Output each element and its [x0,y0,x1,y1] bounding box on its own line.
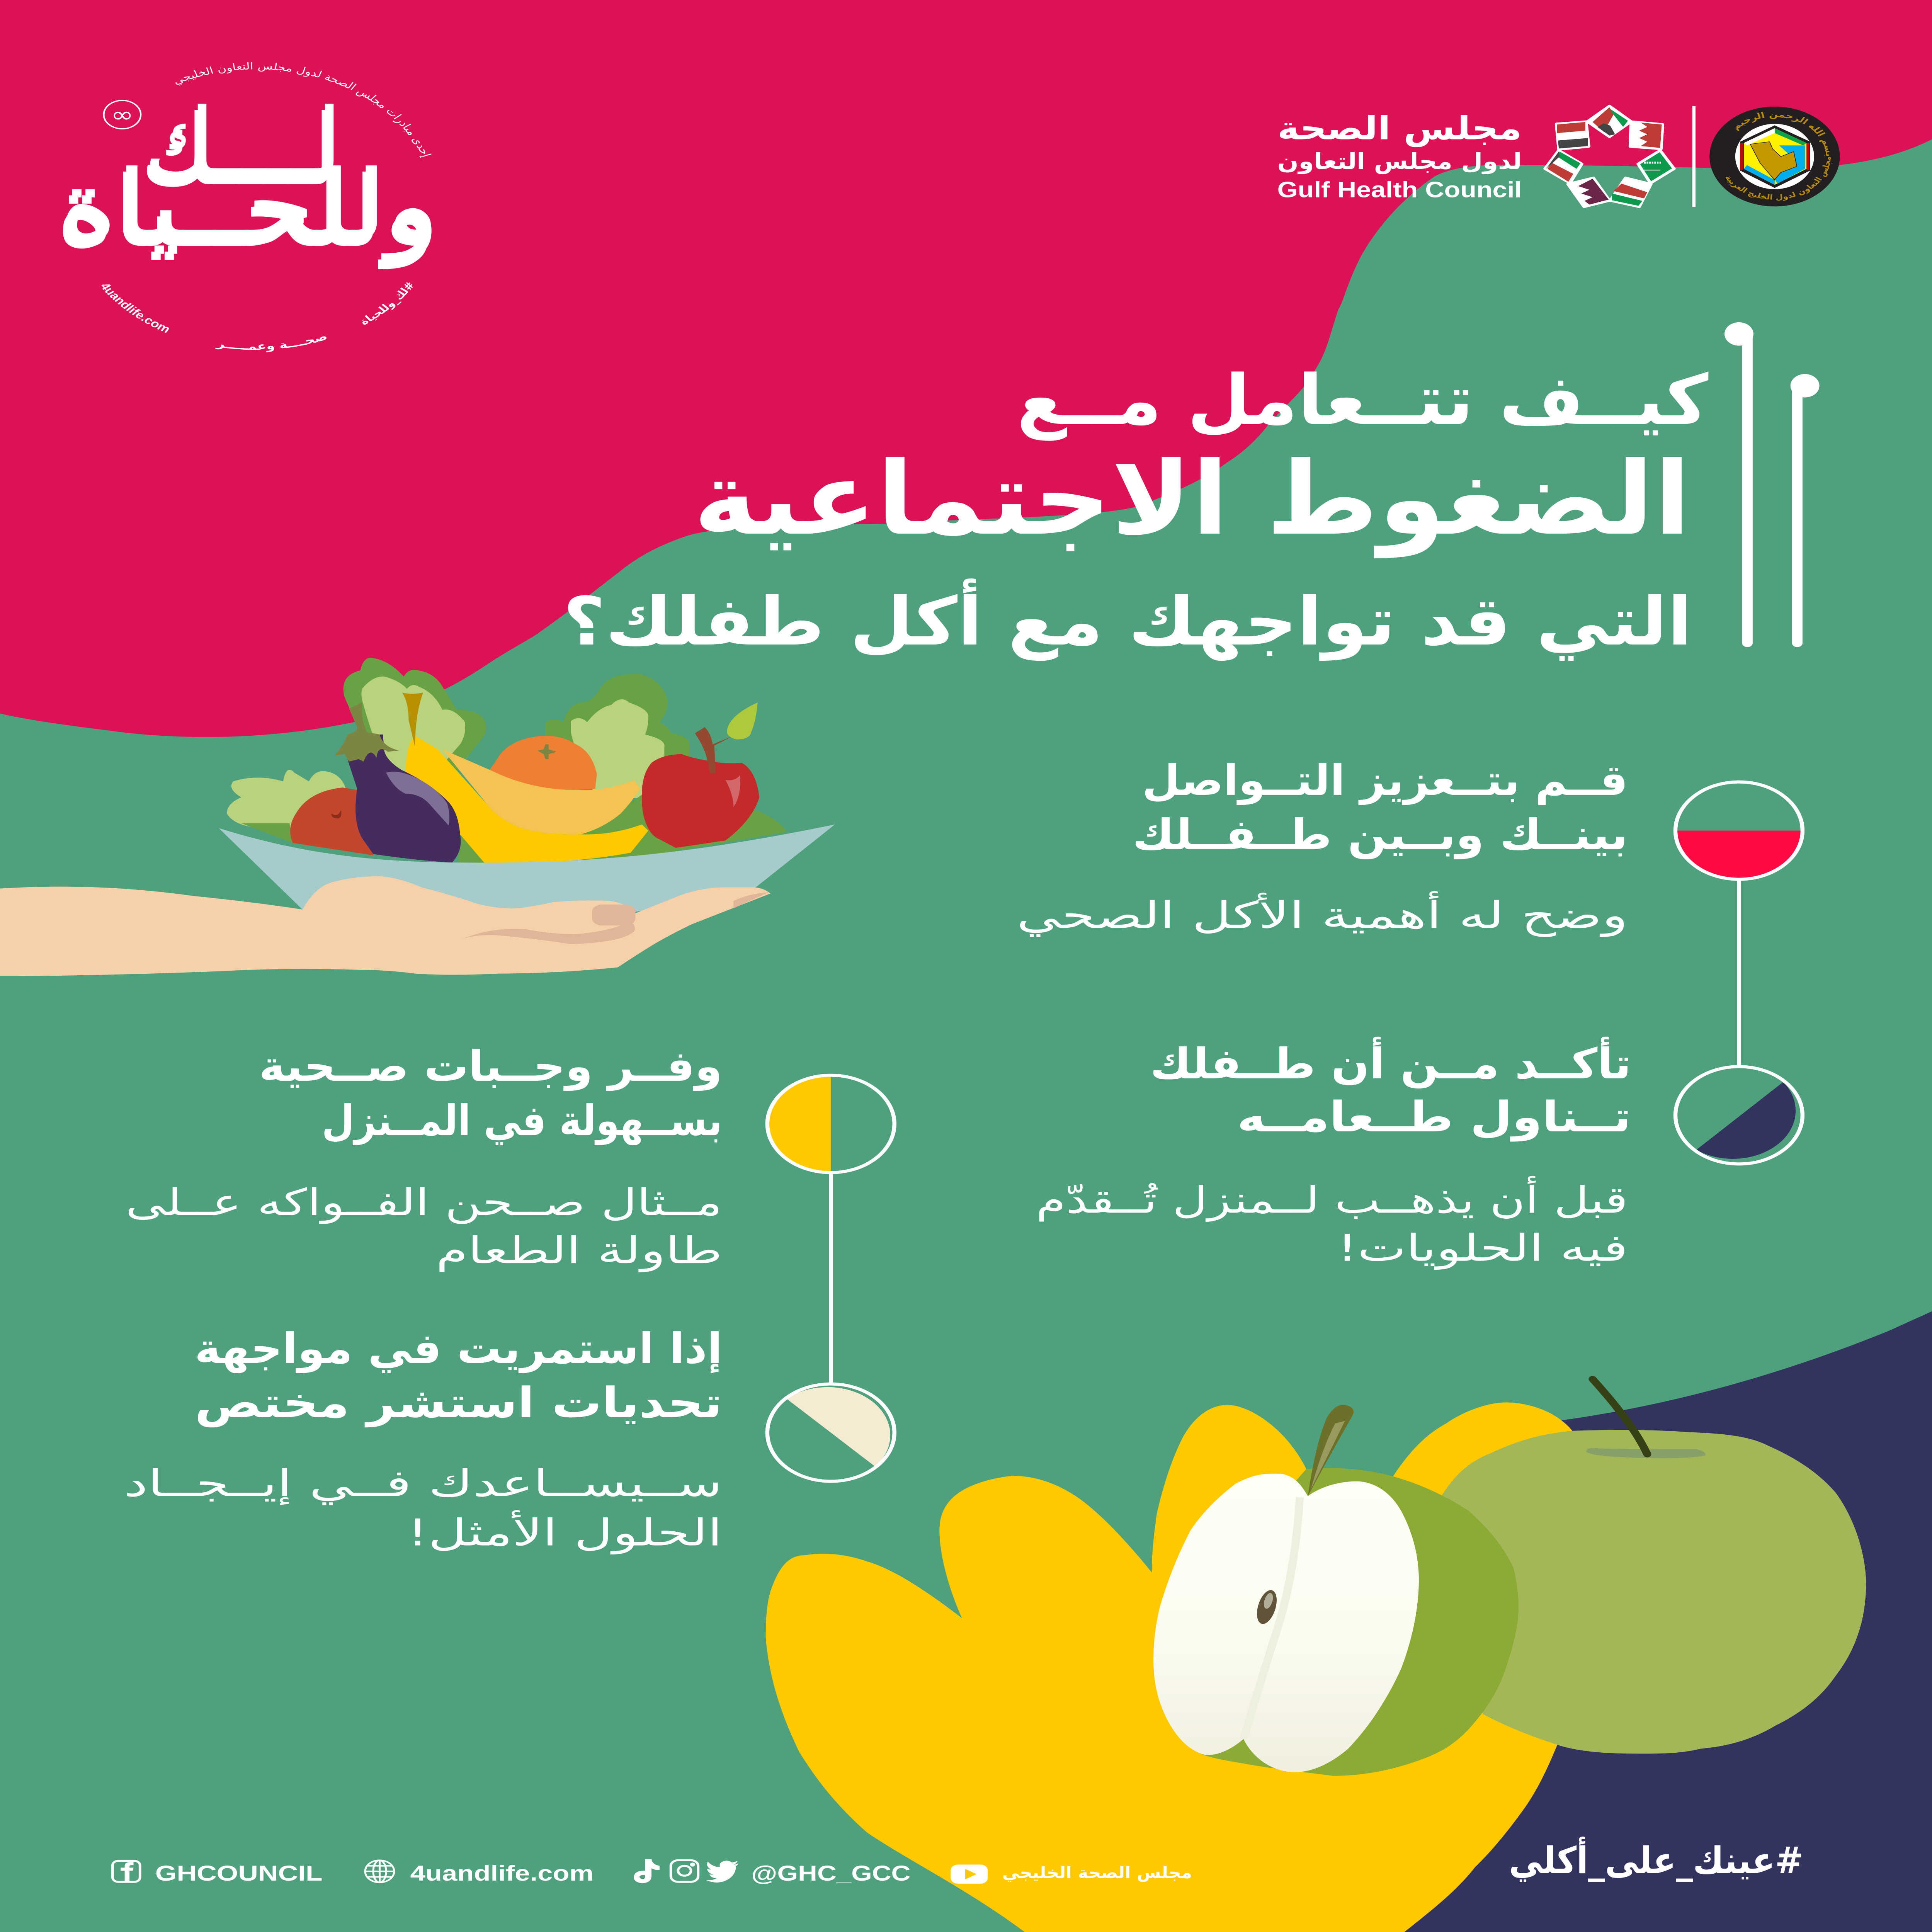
left dark lettuce [344,658,486,789]
title [563,360,1709,661]
orange [489,736,597,790]
pink top shape [0,0,1932,737]
logo wordmark: lak [141,89,341,207]
illustration: yellow splash [766,1403,1609,1932]
logo infinity mark: ∞ [111,102,134,127]
flag: Bahrain [1630,122,1663,149]
icon: GCC seal [1709,107,1840,206]
illustration: green apple [1153,1379,1866,1776]
step one: communication: قــم بتــعزيز التــواصل [1142,756,1628,805]
fingertip nail [733,892,769,908]
flesh crease [1243,1497,1300,1739]
flag: Oman [1610,178,1651,207]
bowl [219,825,835,937]
step one: communication: بينــك وبــين طــفــلك [1133,810,1628,859]
step four: consult a specialist: تحديات استشر مختص [195,1378,722,1427]
right light lettuce [571,699,665,799]
cut apple stem highlight [1311,1421,1345,1489]
title line 1: كيــف تتــعامل مــع [1017,360,1709,441]
circle: cream segment [767,1384,895,1481]
seed [1253,1589,1280,1625]
text: facebook handle: GHCOUNCIL [155,1861,323,1885]
left light leaf [227,770,357,829]
step one: communication: وضح له أهمية الأكل الصحي [1017,891,1628,937]
icon: tiktok [634,1859,660,1883]
icon: instagram [671,1860,698,1882]
second banana [442,749,640,835]
logo site text: 4uandlife.com [97,281,173,335]
text: website: 4uandlife.com [410,1861,594,1885]
logo: 4U and Life [56,60,439,352]
icon: gulf flags star [1545,106,1674,207]
illustration: hand with fruit bowl [0,658,835,976]
logo wordmark: wa lil hayat: وللحــياة [56,156,436,269]
seal gold arc text: بسم الله الرحمن الرحيم [1730,110,1835,156]
circle: navy segment [1675,1066,1803,1164]
logo hashtag text: #لك_وللحياة [357,280,418,327]
step two: eating before visits: تــناول طــعامــه [1237,1092,1631,1142]
icon: twitter [706,1861,738,1883]
circle: half yellow [767,1075,895,1173]
timeline left [767,1075,895,1481]
title line 2: الضغوط الاجتماعية [693,440,1691,559]
navy corner shape [1383,1311,1932,1932]
hashtag: #عينك_على_أكلي [1509,1836,1803,1882]
apple leaf [727,702,758,740]
text: handle: @GHC_GCC [751,1861,910,1885]
logo infinity mark [104,100,141,129]
timeline right [1675,782,1803,1164]
title line 3: التي قد تواجهك مع أكل طفلك؟ [563,578,1692,661]
tomato mark [332,810,341,818]
text: youtube channel: مجلس الصحة الخليجي [1002,1864,1192,1882]
orange navel [537,744,556,759]
step four: consult a specialist [124,1324,722,1554]
logo: Gulf Health Council wordmark: Gulf Health Council [1277,178,1522,202]
step three: healthy snacks: مــثال صــحن الفــواكه عــلى [126,1181,722,1225]
hand [0,876,770,976]
apple [642,754,759,848]
logo wordmark: lak: لــــك [141,95,338,207]
apple stem [695,727,733,773]
eggplant highlight [386,772,449,826]
flag: Yemen [1556,122,1589,150]
icon: facebook [112,1861,140,1882]
logo: Gulf Health Council wordmark: مجلس الصحة [1277,110,1522,147]
seal lower gold arc text: مجلس التعاون لدول الخليج العربية [1723,156,1833,201]
cut apple flesh [1153,1474,1419,1772]
thumb nail [592,905,635,925]
step four: consult a specialist: إذا استمريت في مواجهة [195,1324,722,1373]
cut apple skin [1190,1468,1519,1776]
step two: eating before visits: قبل أن يذهــب لــمنزل تُــقدّم [1036,1175,1628,1222]
logo wordmark: lak: لــــك [145,89,341,201]
icon: globe [365,1860,394,1883]
icon: youtube [951,1865,988,1884]
left light lettuce [361,677,465,789]
step three: healthy snacks [126,1042,722,1272]
logo: Gulf Health Council wordmark: لدول مجلس التعاون [1277,148,1522,175]
step four: consult a specialist: الحلول الأمثل! [407,1510,722,1554]
step two: eating before visits [1036,1037,1631,1270]
flag: Kuwait [1545,150,1582,183]
step one: communication [1017,756,1628,937]
step three: healthy snacks: وفــر وجــبات صــحية [259,1042,722,1091]
flag: Saudi Arabia [1638,150,1674,183]
apple stem [1593,1379,1647,1454]
apple highlight [726,775,740,807]
banana stem [402,692,423,747]
logo: Gulf Health Council wordmark [1277,110,1522,202]
cut apple stem [1308,1405,1354,1496]
logo slogan text: صحــــة وعمـــــر [215,330,330,352]
whole apple body [1416,1430,1866,1753]
step two: eating before visits: فيه الحلويات! [1337,1227,1628,1270]
footer social links [112,1859,1192,1885]
step four: consult a specialist: ســيســاعدك فــي إيــجــاد [124,1462,722,1505]
flag: Qatar [1568,178,1609,207]
flag: UAE [1587,106,1631,137]
logo top arc text: إحدى مبادرات مجلس الصحة لدول مجلس التعاون الخليجي [170,60,434,159]
title accent bars [1725,322,1820,647]
apple stem shadow [1586,1448,1706,1458]
right dark lettuce [545,674,690,789]
finger crease [462,922,635,944]
step three: healthy snacks: بســهولة في المــنزل [322,1096,722,1145]
step two: eating before visits: تأكــد مــن أن طــفلك [1150,1037,1631,1088]
banana [405,736,648,863]
bottom green leaves [241,795,787,865]
logo wordmark: wa lil hayat: وللحــياة [60,150,439,263]
circle: half pink [1675,782,1803,880]
tomato [290,787,373,855]
step three: healthy snacks: طاولة الطعام [436,1229,722,1272]
eggplant cap [335,702,399,762]
eggplant [346,735,461,863]
